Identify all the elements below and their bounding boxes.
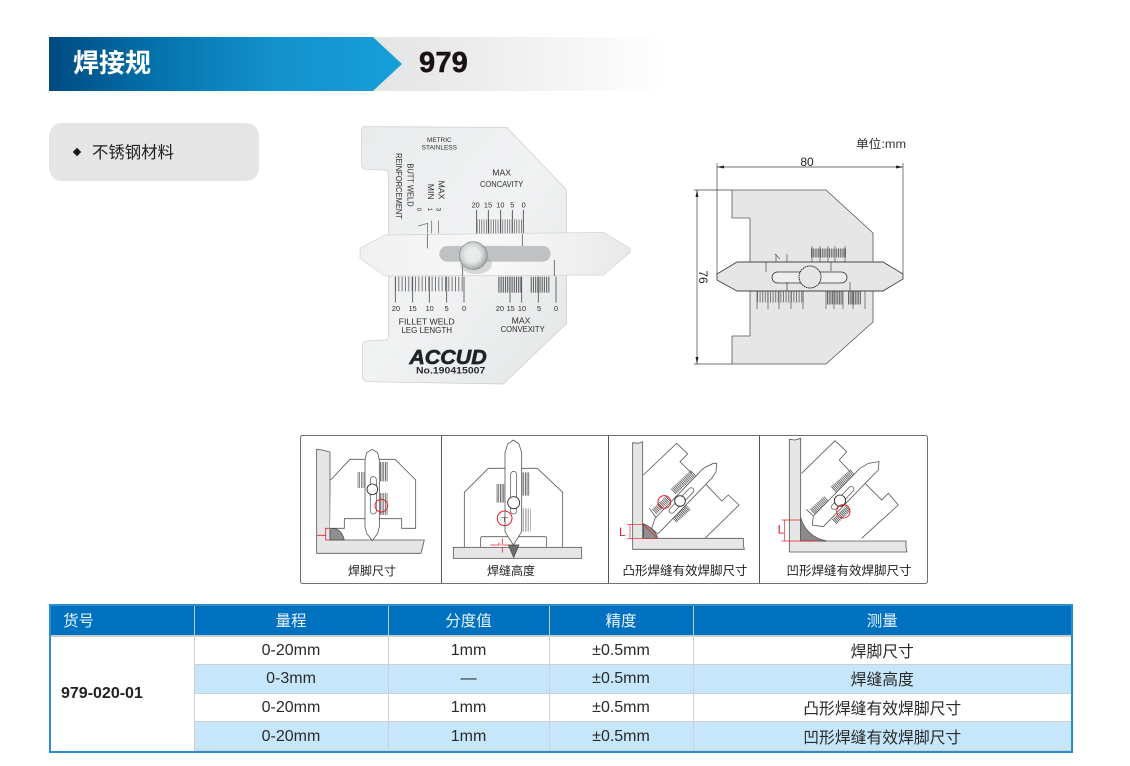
wall and base plate (317, 449, 424, 553)
red reading circle (837, 505, 850, 518)
red dimension mark (490, 538, 509, 553)
upper scale (418, 210, 523, 233)
spec table (49, 604, 1073, 753)
gauge engraved labels: 15 (507, 304, 515, 313)
drawing slider marks (766, 262, 850, 291)
wall and base plate (789, 438, 907, 552)
gauge engraved labels: 5 (537, 304, 541, 313)
table header: 货号 (63, 613, 94, 630)
slider blade (360, 232, 630, 276)
red dimension mark (317, 528, 330, 540)
gauge engraved labels: FILLET WELD (399, 316, 455, 326)
gauge engraved labels: CONVEXITY (501, 324, 545, 334)
gauge slider (812, 462, 879, 527)
gauge engraved labels: 0 (554, 304, 558, 313)
weld bead (801, 517, 827, 541)
row: fillet weld: 1mm (451, 642, 486, 659)
row: convex weld: ±0.5mm (592, 699, 650, 716)
scale ticks (673, 473, 693, 492)
row: concave weld: 0-20mm (262, 728, 320, 745)
gauge slider (652, 463, 717, 534)
table header (51, 606, 1071, 750)
gauge engraved labels: REINFORCEMENT (394, 153, 404, 220)
gauge engraved labels: 20 (496, 304, 504, 313)
row: convex weld: 0-20mm (262, 699, 320, 716)
row: fillet weld: 焊脚尺寸 (851, 644, 914, 661)
base plate (453, 547, 582, 558)
lower scales (395, 277, 556, 303)
row: concave weld: ±0.5mm (592, 728, 650, 745)
row: weld height: ±0.5mm (592, 670, 650, 687)
row: convex weld: 1mm (451, 699, 486, 716)
drawing knob (799, 266, 821, 288)
slider slot (439, 246, 551, 262)
row: weld height (195, 665, 1071, 693)
gauge outline (464, 468, 563, 547)
row: convex weld: 凸形焊缝有效焊脚尺寸 (803, 701, 961, 718)
row: convex weld (262, 699, 961, 718)
feature text: 不锈钢材料 (92, 144, 174, 162)
gauge slider (365, 449, 379, 541)
gauge engraved labels: MAX (492, 168, 511, 178)
product photo: weld gauge (360, 127, 630, 384)
table header: 979-020-01 (61, 685, 143, 702)
row: weld height: 焊缝高度 (851, 672, 914, 689)
caption: concave weld: 凹形焊缝有效焊脚尺寸 (786, 563, 912, 578)
width dimension 80 (717, 155, 903, 274)
panel: fillet weld leg size (317, 449, 424, 553)
gauge engraved labels: 5 (445, 304, 449, 313)
table header: 分度值 (445, 613, 492, 630)
panel: weld height (453, 440, 582, 558)
row: fillet weld (61, 642, 914, 702)
gauge engraved labels: 0 (415, 208, 422, 212)
gauge engraved labels: 10 (496, 200, 504, 209)
title: 焊接规 (73, 48, 151, 78)
caption: convex weld: 凸形焊缝有效焊脚尺寸 (622, 563, 748, 578)
gauge engraved labels: METRIC (427, 138, 452, 144)
gauge inner step (481, 537, 547, 547)
gauge engraved labels: MAX (512, 316, 531, 326)
scale ticks (358, 456, 366, 504)
knob (834, 495, 846, 506)
gauge engraved labels: 20 (472, 200, 480, 209)
knob (367, 484, 378, 495)
gauge engraved labels: MIN (426, 184, 436, 200)
drawing scale ticks (757, 246, 865, 309)
gauge engraved labels: CONCAVITY (480, 179, 524, 189)
serial number: No.190415007 (416, 365, 485, 375)
gauge engraved labels: 20 (392, 304, 400, 313)
gauge engraved labels (392, 138, 558, 335)
slider marks (427, 234, 554, 276)
drawing slider (717, 262, 903, 291)
row: fillet weld: 0-20mm (262, 642, 320, 659)
gauge engraved labels: 10 (518, 304, 526, 313)
table header: 量程 (275, 613, 306, 630)
scale ticks (497, 465, 505, 521)
gauge engraved labels: MAX (437, 181, 447, 200)
bullet (73, 148, 81, 156)
gauge engraved labels: 0 (462, 304, 466, 313)
red reading circle (658, 496, 671, 508)
gauge engraved labels: 5 (510, 200, 514, 209)
gauge body (362, 127, 567, 384)
feature pill (49, 123, 259, 181)
gauge engraved labels: BUTT WELD (405, 163, 415, 207)
gauge outline (643, 443, 739, 538)
gauge engraved labels: 1 (426, 208, 433, 212)
weld bead (643, 524, 658, 538)
weld bead (330, 528, 344, 540)
caption: fillet weld: 焊脚尺寸 (348, 563, 396, 578)
red reading circle (375, 499, 388, 512)
panel: convex weld (619, 442, 744, 549)
knob (675, 496, 685, 506)
row: concave weld (195, 722, 1071, 750)
gauge engraved labels: 0 (522, 200, 526, 209)
row: concave weld: 凹形焊缝有效焊脚尺寸 (803, 730, 961, 747)
height dimension 76: 76 (696, 270, 710, 284)
banner blue arrow (49, 37, 402, 91)
gauge outline (802, 441, 898, 538)
row: concave weld: 1mm (451, 728, 486, 745)
gauge engraved labels: 15 (409, 304, 417, 313)
banner grey fade band (369, 37, 669, 91)
header banner (49, 37, 584, 91)
row: weld height: 0-3mm (266, 670, 316, 687)
table header: 测量 (867, 613, 898, 630)
red dimension L: L (619, 525, 626, 539)
red dimension L: L (778, 522, 785, 536)
ACCUD logo: ACCUD (408, 346, 487, 369)
slider slot (370, 477, 376, 514)
slider slot (830, 485, 855, 511)
red reading circle (497, 511, 512, 526)
row: weld height: — (460, 670, 476, 687)
gauge engraved labels: 15 (484, 200, 492, 209)
caption: weld height: 焊缝高度 (487, 563, 535, 578)
wall and base plate (633, 442, 744, 549)
panel: concave weld (778, 438, 907, 552)
unit label: 单位:mm (856, 136, 906, 151)
gauge engraved labels: 3 (435, 208, 442, 212)
dimension drawing (694, 155, 903, 364)
usage diagram frame (300, 436, 928, 584)
gauge engraved labels: LEG LENGTH (401, 325, 452, 335)
weld bead (508, 545, 519, 558)
gauge engraved labels: 10 (426, 304, 434, 313)
slider slot (668, 487, 695, 514)
gauge slider (505, 440, 522, 545)
gauge engraved labels: STAINLESS (422, 145, 457, 151)
scale ticks (833, 472, 853, 489)
drawing body (732, 190, 873, 364)
table header: 精度 (605, 613, 636, 630)
drawing slot (772, 272, 847, 283)
model number: 979 (419, 47, 468, 79)
width dimension 80: 80 (800, 155, 814, 169)
knob (459, 242, 492, 274)
row: fillet weld: ±0.5mm (592, 642, 650, 659)
gauge outline (330, 459, 416, 528)
height dimension 76 (694, 190, 732, 364)
slider slot (511, 471, 517, 514)
knob (508, 497, 520, 509)
